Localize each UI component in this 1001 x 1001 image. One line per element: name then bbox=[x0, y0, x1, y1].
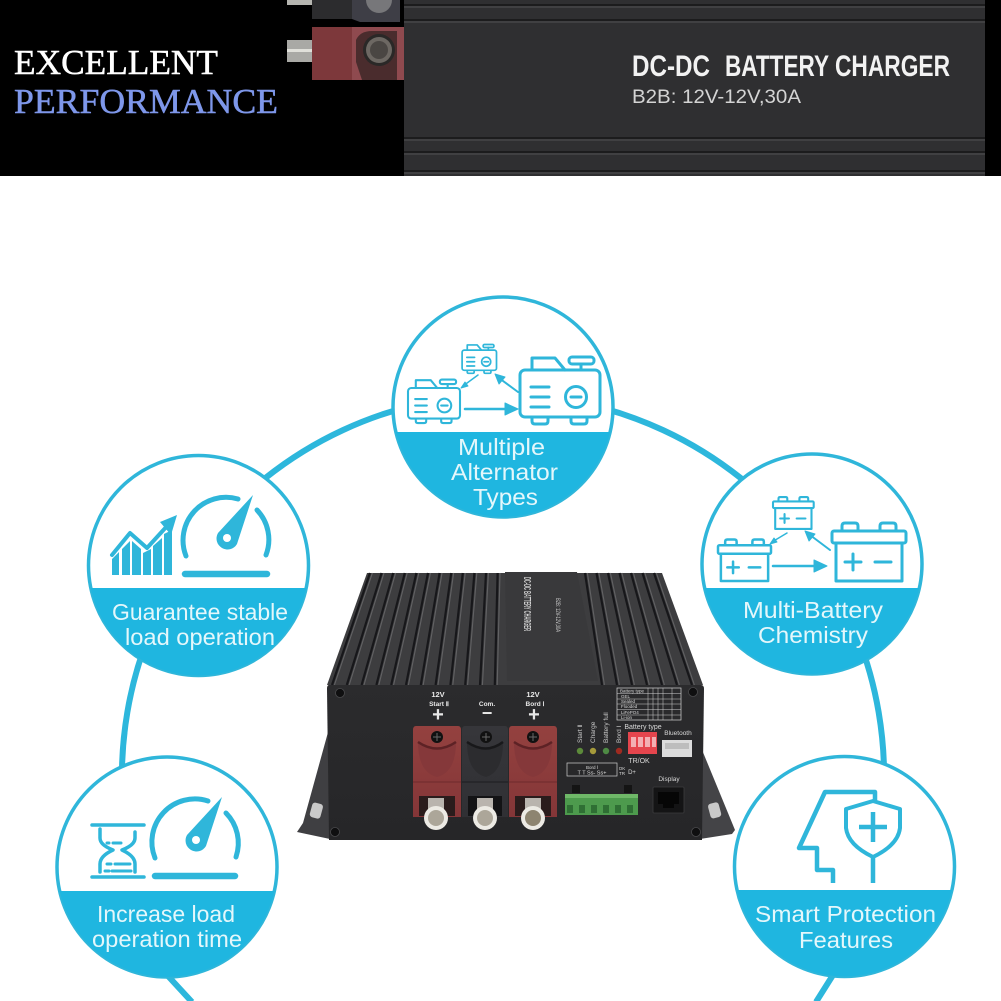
battery type table bbox=[617, 688, 681, 720]
lid label: B2B: 12V-12V,30A bbox=[632, 87, 801, 108]
icon: hourglass bbox=[92, 825, 144, 877]
mounting flanges bbox=[297, 725, 735, 839]
terminal block label: Bord Ⅰ bbox=[586, 765, 598, 770]
connecting ring bbox=[122, 395, 884, 1001]
lid label: CHARGER bbox=[835, 50, 950, 83]
bluetooth connector: Bluetooth bbox=[664, 730, 692, 737]
lid label: DC-DC bbox=[632, 50, 710, 83]
terminal labels: Start Ⅱ bbox=[429, 700, 449, 708]
charger photo: aluminium lid bbox=[404, 0, 985, 176]
icon: speed gauge bbox=[183, 495, 269, 574]
terminal block label bbox=[567, 763, 636, 776]
battery type table: Battery type bbox=[620, 688, 645, 694]
terminal: red start bbox=[413, 726, 461, 830]
label bbox=[451, 434, 558, 510]
finned top face bbox=[327, 572, 703, 685]
terminal labels: Com. bbox=[479, 701, 495, 708]
lid label bbox=[632, 50, 950, 108]
lid label: BATTERY bbox=[725, 50, 829, 83]
label bbox=[92, 901, 242, 952]
headline bbox=[14, 43, 278, 121]
icon: head with shield bbox=[799, 792, 900, 883]
label bbox=[112, 599, 288, 650]
terminal labels: + bbox=[432, 704, 444, 726]
label: Chemistry bbox=[758, 622, 869, 648]
status LEDs: Start Ⅱ bbox=[577, 724, 584, 743]
lid label: B2B: 12V-12V,30A bbox=[554, 598, 560, 632]
green terminal block bbox=[565, 785, 638, 815]
label: Types bbox=[473, 484, 538, 510]
status LEDs: Bord Ⅰ bbox=[616, 725, 623, 743]
label: operation time bbox=[92, 926, 242, 952]
terminal labels: Bord Ⅰ bbox=[526, 700, 545, 708]
terminal block label: T T Ss- Ss+ bbox=[578, 770, 606, 776]
icon: speed gauge bbox=[152, 797, 238, 876]
terminal labels bbox=[429, 690, 545, 726]
finned top face: DC-DC BATTERY CHARGER bbox=[521, 577, 532, 631]
label: Smart Protection bbox=[755, 901, 936, 927]
header banner bbox=[0, 0, 1001, 176]
status LEDs: Charge bbox=[590, 721, 597, 743]
terminal: black common bbox=[462, 726, 508, 830]
DIP switch bbox=[624, 724, 662, 765]
terminal labels: 12V bbox=[431, 690, 445, 699]
terminal labels: − bbox=[482, 703, 492, 723]
label: Multiple bbox=[458, 434, 545, 460]
headline: PERFORMANCE bbox=[14, 82, 278, 121]
label: load operation bbox=[125, 624, 275, 650]
battery type table: Li-ion bbox=[621, 715, 633, 720]
lid label bbox=[521, 577, 560, 632]
circle: Increase load operation time bbox=[57, 757, 277, 977]
icon: batteries with arrows bbox=[718, 497, 906, 581]
battery type table: LiFePO4 bbox=[621, 710, 639, 715]
status LEDs bbox=[577, 712, 623, 754]
label: Alternator bbox=[451, 459, 558, 485]
label bbox=[743, 597, 884, 648]
battery type table: GEL bbox=[621, 694, 631, 699]
circle: Guarantee stable load operation bbox=[88, 456, 308, 676]
display port bbox=[653, 776, 684, 813]
label: Features bbox=[799, 927, 893, 953]
DIP switch: TR/OK bbox=[628, 758, 650, 765]
DIP switch: Battery type bbox=[624, 724, 662, 731]
label: Multi-Battery bbox=[743, 597, 884, 623]
bluetooth connector bbox=[662, 730, 692, 757]
label bbox=[755, 901, 936, 953]
product: DC-DC charger bbox=[297, 572, 735, 840]
terminal block label: D+ bbox=[628, 770, 636, 776]
display port: Display bbox=[658, 776, 680, 783]
circle: Multiple Alternator Types bbox=[393, 297, 613, 517]
battery type table: Sealed bbox=[621, 699, 636, 704]
circle: Smart Protection Features bbox=[734, 756, 954, 976]
label: Guarantee stable bbox=[112, 599, 288, 625]
terminal block label: OK bbox=[619, 766, 625, 771]
terminal labels: + bbox=[528, 704, 540, 726]
circle: Multi-Battery Chemistry bbox=[702, 454, 922, 674]
terminal labels: 12V bbox=[526, 690, 540, 699]
status LEDs: Battery full bbox=[603, 712, 610, 743]
battery type table: Flooded bbox=[621, 704, 638, 709]
icon: alternators with arrows bbox=[408, 345, 600, 424]
terminal block label: TR bbox=[619, 771, 626, 776]
icon: growth chart bbox=[112, 515, 177, 575]
headline: EXCELLENT bbox=[14, 43, 218, 82]
front panel bbox=[327, 685, 704, 840]
terminal: red bord bbox=[509, 726, 557, 830]
label: Increase load bbox=[97, 901, 235, 927]
charger photo: terminals bbox=[287, 0, 404, 80]
